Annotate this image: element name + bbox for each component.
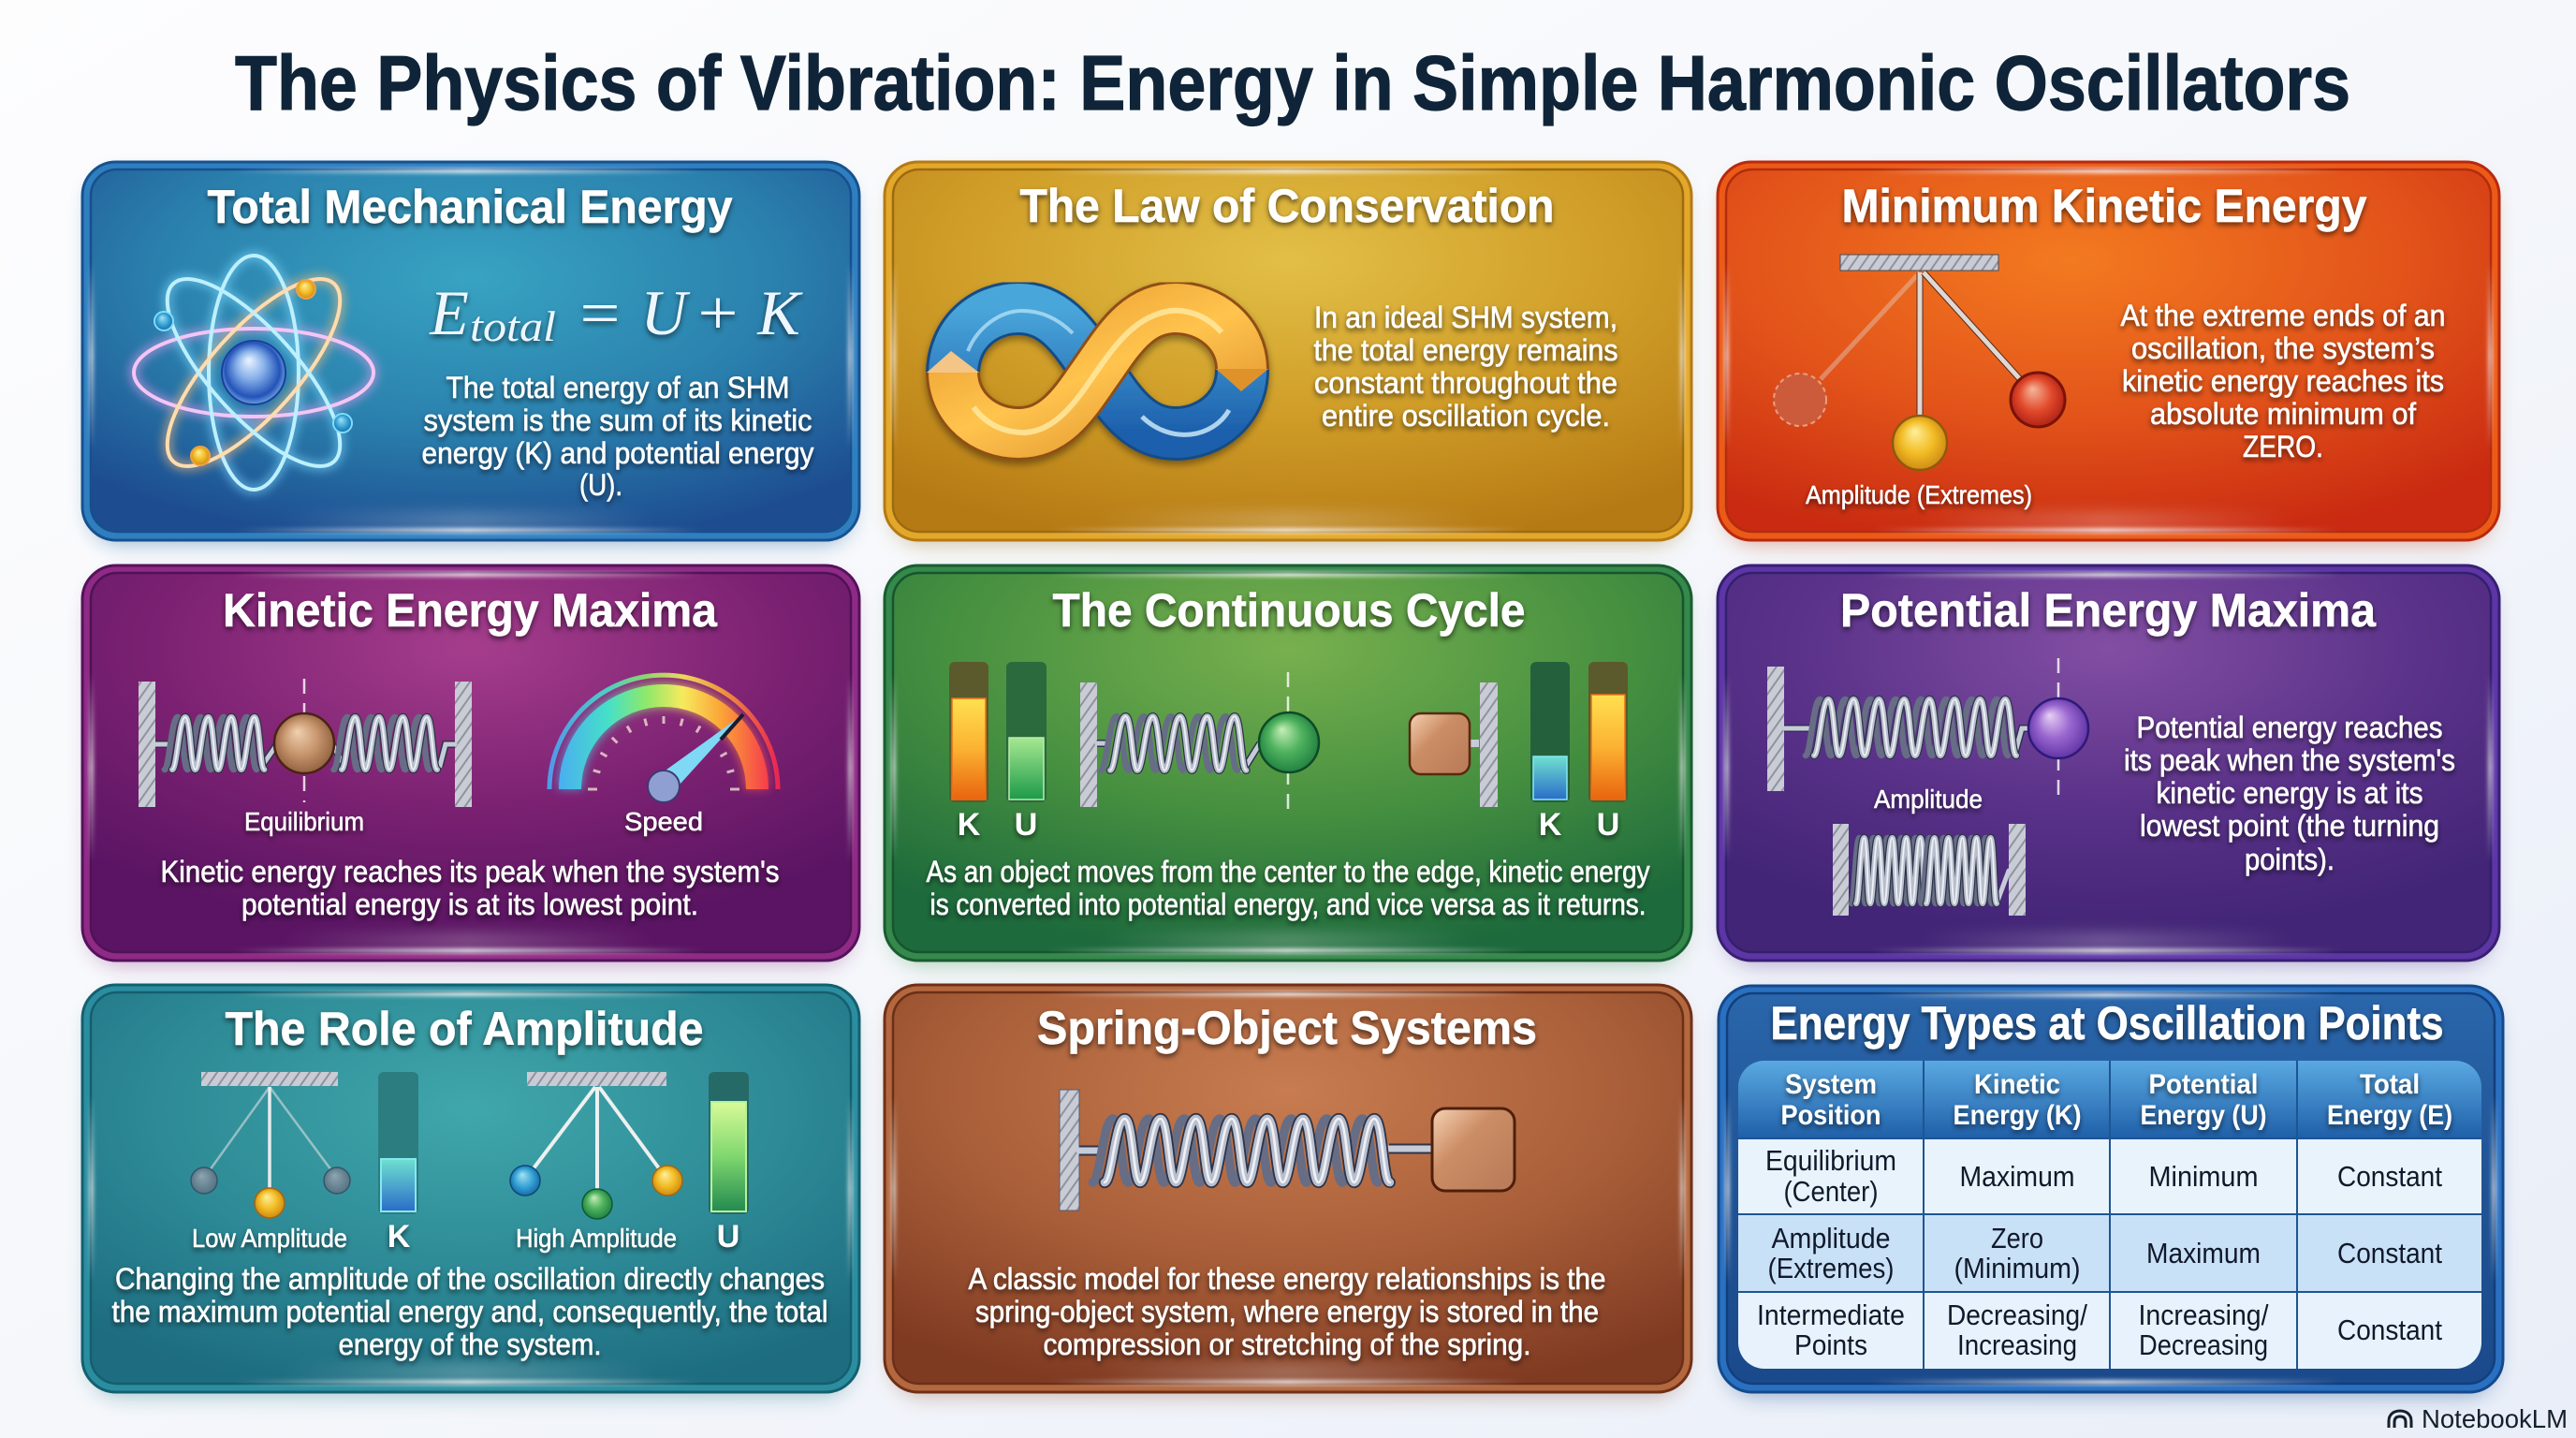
text block: is converted into potential energy, and vice versa as it returns.	[930, 888, 1646, 921]
table body: Increasing	[1957, 1328, 2077, 1361]
table body: Decreasing	[2139, 1328, 2268, 1361]
text block: potential energy is at its lowest point.	[242, 888, 698, 921]
bar: K	[378, 1072, 418, 1214]
heading: Total Mechanical Energy	[208, 181, 733, 233]
panel: potential energy maxima	[1718, 565, 2499, 965]
text block: energy (K) and potential energy	[421, 436, 814, 470]
table body: Points	[1794, 1328, 1867, 1361]
panel: total mechanical energy	[82, 162, 859, 545]
table body	[1757, 1144, 2442, 1361]
heading: The Law of Conservation	[1020, 180, 1554, 232]
table body: Increasing/	[2138, 1299, 2269, 1331]
bars: left K and U: U	[1015, 807, 1037, 843]
icon: pendulum	[1774, 255, 2065, 470]
text block	[2121, 299, 2445, 463]
logo: NotebookLM: NotebookLM	[2422, 1404, 2568, 1433]
heading: Spring-Object Systems	[1037, 1002, 1537, 1054]
table body: Constant	[2337, 1237, 2442, 1269]
icon: spring and block	[1060, 1090, 1515, 1211]
text block: the total energy remains	[1314, 333, 1617, 367]
table header: Potential	[2149, 1069, 2258, 1100]
formula: +	[698, 277, 738, 348]
text block: entire oscillation cycle.	[1322, 399, 1610, 433]
icon: stretched spring	[1767, 658, 2088, 800]
formula	[429, 277, 803, 350]
text block: Kinetic energy reaches its peak when the system's	[161, 855, 779, 888]
table body: Maximum	[1960, 1160, 2074, 1193]
text block: spring-object system, where energy is stored in the	[975, 1295, 1599, 1328]
icon: infinity loop	[927, 308, 1268, 434]
label: U	[717, 1219, 739, 1255]
heading: The Continuous Cycle	[1052, 584, 1526, 637]
table header: Kinetic	[1974, 1069, 2060, 1100]
heading: Minimum Kinetic Energy	[1842, 180, 2367, 232]
label: High Amplitude	[516, 1224, 677, 1253]
bars: right K and U	[1530, 662, 1628, 843]
text block: A classic model for these energy relationships is the	[968, 1262, 1606, 1296]
text block: ZERO.	[2243, 430, 2323, 463]
bars: left K and U	[949, 662, 1046, 843]
icon: low amplitude pendulum	[191, 1072, 350, 1218]
table header	[1780, 1069, 2452, 1131]
text block	[968, 1262, 1606, 1361]
text block: The total energy of an SHM	[446, 371, 790, 404]
table body: Maximum	[2146, 1237, 2261, 1269]
text block	[927, 855, 1649, 921]
icon: spring with green ball	[1080, 672, 1319, 814]
text block: energy of the system.	[339, 1328, 601, 1361]
text block: compression or stretching of the spring.	[1043, 1328, 1531, 1361]
label: Speed	[624, 807, 703, 836]
bars: right K and U: K	[1539, 807, 1562, 843]
table body: (Center)	[1784, 1175, 1878, 1208]
panel: minimum kinetic energy	[1718, 162, 2499, 545]
panel: continuous cycle	[885, 565, 1691, 965]
table body: Constant	[2337, 1313, 2442, 1346]
formula: K	[756, 277, 803, 348]
table body: Zero	[1991, 1222, 2043, 1255]
text block	[112, 1262, 827, 1361]
text block: constant throughout the	[1314, 366, 1617, 400]
text block	[421, 371, 814, 502]
label: Low Amplitude	[192, 1224, 347, 1253]
table body: Decreasing/	[1947, 1299, 2087, 1331]
text block: the maximum potential energy and, consequently, the total	[112, 1295, 827, 1328]
bar: U	[709, 1072, 749, 1214]
table body: Minimum	[2149, 1160, 2258, 1193]
title: The Physics of Vibration: Energy in Simple Harmonic Oscillators	[235, 39, 2350, 126]
icon: speed gauge	[549, 675, 778, 802]
heading: Kinetic Energy Maxima	[223, 584, 718, 637]
text block	[1314, 301, 1617, 433]
text block	[2124, 711, 2455, 876]
formula: =	[580, 277, 620, 348]
bars: left K and U: K	[958, 807, 981, 843]
icon: spring with ball at equilibrium	[139, 679, 472, 807]
table body: (Minimum)	[1954, 1252, 2080, 1284]
label: K	[388, 1219, 411, 1255]
text block: kinetic energy is at its	[2157, 776, 2422, 810]
table body: Intermediate	[1757, 1299, 1905, 1331]
text block: Changing the amplitude of the oscillation directly changes	[115, 1262, 825, 1296]
panel: kinetic energy maxima	[82, 565, 859, 965]
text block: Potential energy reaches	[2136, 711, 2443, 744]
table body: Equilibrium	[1765, 1144, 1896, 1177]
table header: System	[1785, 1069, 1877, 1100]
text block: lowest point (the turning	[2140, 809, 2439, 843]
table	[1738, 1061, 2481, 1369]
table body: (Extremes)	[1767, 1252, 1895, 1284]
label: Equilibrium	[244, 807, 364, 836]
text block: its peak when the system's	[2124, 743, 2455, 777]
heading: Potential Energy Maxima	[1840, 584, 2377, 637]
heading: Energy Types at Oscillation Points	[1771, 997, 2443, 1049]
text block: absolute minimum of	[2150, 397, 2416, 431]
table header: Energy (K)	[1953, 1100, 2082, 1131]
bars: right K and U: U	[1597, 807, 1619, 843]
table header: Energy (U)	[2140, 1100, 2267, 1131]
table header: Total	[2360, 1069, 2420, 1100]
text block: (U).	[579, 468, 622, 502]
label: Amplitude	[1874, 785, 1983, 814]
panel: role of amplitude	[82, 985, 859, 1397]
panel: law of conservation	[885, 162, 1691, 545]
icon: block against wall	[1410, 682, 1498, 807]
text block: In an ideal SHM system,	[1314, 301, 1617, 334]
panel: energy types table	[1719, 986, 2503, 1397]
text block: system is the sum of its kinetic	[423, 404, 812, 437]
text block: points).	[2245, 843, 2334, 876]
icon: compressed spring	[1833, 824, 2026, 916]
text block: At the extreme ends of an	[2121, 299, 2445, 332]
label: Amplitude (Extremes)	[1806, 480, 2032, 509]
table body: Amplitude	[1771, 1222, 1891, 1255]
text block: As an object moves from the center to the edge, kinetic energy	[927, 855, 1649, 888]
formula: E	[429, 277, 469, 348]
text block: oscillation, the system’s	[2131, 331, 2435, 365]
icon: atom	[134, 255, 373, 491]
icon: high amplitude pendulum	[510, 1072, 682, 1219]
text block: kinetic energy reaches its	[2122, 364, 2444, 398]
text block	[161, 855, 779, 921]
formula: total	[470, 302, 556, 350]
table header: Energy (E)	[2327, 1100, 2452, 1131]
formula: U	[640, 277, 690, 348]
heading: The Role of Amplitude	[225, 1003, 704, 1055]
table header: Position	[1780, 1100, 1881, 1131]
table body: Constant	[2337, 1160, 2442, 1193]
panel: spring-object systems	[885, 985, 1691, 1397]
